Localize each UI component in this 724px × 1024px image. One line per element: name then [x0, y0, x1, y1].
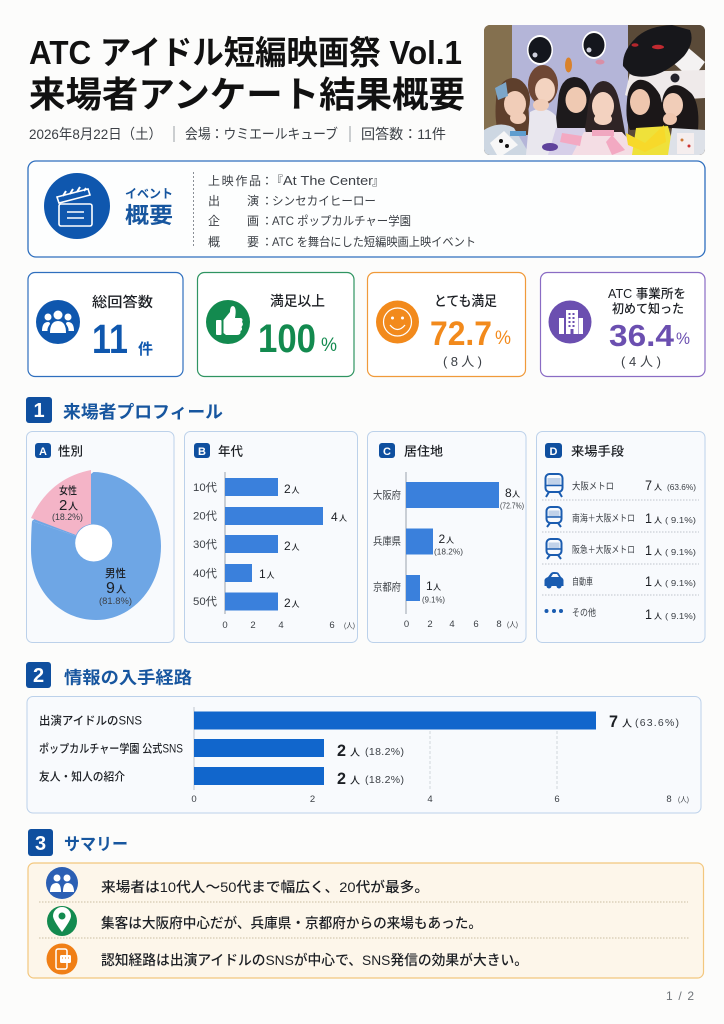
bar chart: age group: 20代 — [193, 510, 217, 522]
pie chart: gender split — [31, 470, 161, 620]
bar chart: residence: 人 — [512, 490, 520, 499]
panel C heading: 居住地 — [404, 444, 444, 458]
icon: phone with chat bubble — [46, 944, 78, 974]
bar chart: information sources: 4 — [427, 794, 433, 805]
pie label: women: 女性 — [59, 484, 77, 497]
row: other: 1 — [645, 606, 652, 622]
pie label: women: (18.2%) — [52, 512, 83, 522]
bar chart: information sources: (18.2%) — [365, 774, 404, 786]
event details: ： — [261, 174, 273, 188]
KPI card: first learned about ATC office: 36.4 — [609, 318, 675, 353]
bar chart: information sources: 2 — [310, 794, 315, 805]
row: Hankyu + Osaka Metro: 人 — [654, 548, 662, 557]
bar chart: information sources: (人) — [678, 795, 689, 804]
summary item: awareness channel: 認知経路は出演アイドルのSNSが中心で、SNS発信の効果が大きい。 — [101, 952, 528, 968]
row: Nankai + Osaka Metro: 人 — [654, 516, 662, 525]
row: other: 人 — [654, 612, 662, 621]
bar chart: age group: 6 — [329, 620, 335, 631]
event details: ： — [261, 214, 273, 228]
pie label: men: 男性 — [105, 566, 126, 580]
panel: event overview — [28, 161, 705, 257]
event overview heading: イベント — [125, 187, 173, 201]
bar chart: information sources: (18.2%) — [365, 746, 404, 758]
KPI card: satisfied or above — [198, 272, 354, 376]
bar chart: residence: 2 — [438, 532, 446, 546]
panel B heading: B — [198, 446, 206, 458]
row: Osaka Metro: 人 — [654, 483, 662, 492]
heading: section 3 summary: 3 — [35, 833, 46, 855]
event date, venue and response count: 会場：ウミエールキューブ — [185, 126, 338, 142]
row: Osaka Metro: 大阪メトロ — [572, 480, 614, 492]
icon: thumbs up — [206, 300, 250, 344]
panel C heading: C — [383, 446, 391, 458]
bar chart: age group: 10代 — [193, 481, 217, 494]
heading: section 3 summary: サマリー — [64, 835, 128, 854]
heading: section 1 visitor profile: 来場者プロフィール — [63, 402, 223, 422]
panel A heading: A — [39, 446, 47, 458]
KPI card: first learned about ATC office — [540, 272, 705, 376]
bar chart: age group: 30代 — [193, 538, 217, 551]
KPI card: total responses: 件 — [138, 341, 153, 358]
KPI card: first learned about ATC office: % — [676, 329, 690, 348]
panel B: age group — [184, 432, 358, 642]
bar chart: age group: 人 — [292, 486, 300, 495]
event details: 出 — [208, 194, 220, 208]
KPI card: total responses: 総回答数 — [92, 294, 153, 310]
KPI card: very satisfied: ( 8 人 ) — [443, 354, 482, 369]
bar chart: information sources: 2 — [337, 769, 346, 788]
heading: section 2 information sources: 情報の入手経路 — [64, 668, 192, 688]
panel D: means of transport — [536, 432, 705, 642]
event date, venue and response count — [29, 126, 446, 142]
bar chart: age group: 4 — [278, 620, 284, 631]
KPI card: first learned about ATC office: ( 4 人 ) — [621, 354, 661, 369]
bar chart: age group: 1 — [259, 567, 266, 581]
row: car: 1 — [645, 573, 652, 589]
pie label: men — [99, 566, 132, 607]
row: Hankyu + Osaka Metro: 阪急＋大阪メトロ — [572, 544, 635, 556]
panel B heading: 年代 — [218, 444, 243, 458]
heading: section 2 information sources: 2 — [33, 665, 44, 687]
event details: 概 — [208, 235, 220, 249]
bar chart: age group: 50代 — [193, 595, 217, 608]
bar chart: age group: 4 — [331, 510, 338, 524]
icon: smiley — [376, 300, 419, 344]
bar chart: residence: 京都府 — [373, 582, 401, 594]
row: car: 人 — [654, 579, 662, 588]
event details: 』 — [372, 174, 384, 188]
icon: dots — [544, 609, 563, 613]
panel A: gender — [26, 432, 174, 642]
bar chart: residence: 4 — [449, 619, 455, 630]
bar chart: residence: (18.2%) — [434, 548, 463, 556]
bar chart: residence: 大阪府 — [373, 488, 401, 502]
bar chart: age group: 2 — [250, 620, 256, 631]
pie label: men: (81.8%) — [99, 596, 132, 607]
panel: summary — [28, 863, 704, 978]
KPI card: satisfied or above: 100 — [258, 317, 316, 361]
icon: train — [546, 507, 562, 527]
event details: 上映作品 — [208, 174, 261, 188]
icon: clapperboard — [44, 173, 110, 239]
bar chart: age group: 2 — [284, 596, 291, 610]
row: other: その他 — [572, 607, 596, 619]
bar chart: residence: 人 — [446, 536, 454, 545]
bar chart: information sources: 人 — [350, 748, 360, 759]
KPI card: total responses: 11 — [92, 316, 128, 362]
pie label: women: 2 — [59, 497, 67, 514]
KPI card: satisfied or above: 満足以上 — [270, 293, 325, 309]
event details: ATC ポップカルチャー学園 — [272, 213, 411, 228]
event details — [208, 173, 476, 249]
bar chart: age group: 人 — [292, 543, 300, 552]
event date, venue and response count: 2026年8月22日（土） — [29, 126, 162, 142]
title: ATC アイドル短編映画祭 Vol.1 — [29, 34, 462, 71]
bar chart: residence: 8 — [496, 619, 502, 630]
row: Hankyu + Osaka Metro — [546, 539, 696, 559]
icon: train — [546, 539, 562, 559]
panel D heading — [545, 443, 625, 458]
row: Nankai + Osaka Metro: 1 — [645, 510, 652, 526]
KPI card: very satisfied — [368, 272, 526, 376]
event overview heading — [125, 187, 173, 228]
bar chart: residence: 8 — [505, 486, 512, 500]
bar chart: information sources: 出演アイドルのSNS — [39, 714, 142, 728]
bar chart: information sources: 8 — [666, 794, 672, 805]
bar chart: age group: 40代 — [193, 567, 217, 580]
bar chart: residence: 6 — [473, 619, 479, 630]
row: Hankyu + Osaka Metro: ( 9.1%) — [665, 547, 696, 557]
KPI card: very satisfied: % — [495, 328, 511, 349]
icon: people — [36, 300, 80, 344]
KPI card: very satisfied: とても満足 — [434, 293, 497, 309]
row: Nankai + Osaka Metro: ( 9.1%) — [665, 515, 696, 525]
bar chart: information sources: 人 — [350, 776, 360, 787]
bar chart: age group: (人) — [344, 621, 355, 630]
panel D heading: 来場手段 — [571, 444, 625, 458]
icon: office building — [548, 300, 592, 344]
KPI card: very satisfied: 72.7 — [430, 315, 492, 353]
page number: 1 / 2 — [666, 989, 694, 1003]
event details: シンセカイヒーロー — [272, 194, 376, 208]
heading: section 2 information sources — [26, 662, 192, 688]
event details: ： — [261, 194, 273, 208]
bar chart: age group: 人 — [266, 571, 274, 580]
event details: 要 — [247, 235, 259, 249]
bar chart: residence: (72.7%) — [500, 502, 524, 510]
row: Osaka Metro: 7 — [645, 477, 652, 493]
panel C: residence — [368, 432, 526, 642]
heading: section 1 visitor profile — [26, 397, 223, 423]
heading: section 1 visitor profile: 1 — [33, 400, 45, 422]
title — [29, 34, 465, 115]
photo: idols in front of the mascot backdrop — [484, 25, 705, 155]
bar chart: age group — [193, 472, 355, 631]
event details: 演 — [247, 194, 259, 208]
row: Hankyu + Osaka Metro: 1 — [645, 542, 652, 558]
KPI card: satisfied or above: % — [321, 335, 337, 356]
event details: 企 — [208, 214, 220, 228]
panel C heading — [379, 443, 444, 458]
summary item: visitors — [46, 867, 429, 899]
bar chart: age group: 0 — [222, 620, 228, 631]
panel B heading — [194, 443, 243, 458]
bar chart: residence: 人 — [433, 583, 441, 592]
event details: ATC を舞台にした短編映画上映イベント — [272, 234, 476, 249]
bar chart: residence: 0 — [404, 619, 409, 630]
KPI card: first learned about ATC office: ATC 事業所を — [608, 286, 686, 301]
panel A heading — [35, 443, 83, 458]
bar chart: information sources: 7 — [609, 712, 618, 731]
bar chart: information sources: (63.6%) — [635, 717, 679, 729]
bar chart: information sources: 友人・知人の紹介 — [39, 770, 125, 784]
icon: people — [46, 867, 78, 899]
event details: 『 — [271, 174, 283, 188]
bar chart: residence: 1 — [426, 579, 433, 593]
KPI card: total responses — [28, 272, 183, 376]
bar chart: age group: 2 — [284, 539, 291, 553]
icon: car — [544, 572, 564, 588]
bar chart: information sources: 人 — [622, 719, 632, 730]
row: other — [544, 606, 696, 622]
summary item: visitors: 来場者は10代人〜50代まで幅広く、20代が最多。 — [101, 879, 429, 895]
summary item: catchment area — [47, 906, 482, 936]
panel: information sources chart — [27, 696, 701, 813]
event details: 画 — [247, 214, 259, 228]
pie label: women: 人 — [68, 502, 78, 513]
title: 来場者アンケート結果概要 — [29, 74, 465, 115]
bar chart: residence: (人) — [507, 620, 518, 629]
bar chart: residence: (9.1%) — [422, 596, 445, 604]
panel A heading: 性別 — [58, 444, 83, 458]
panel D heading: D — [550, 446, 558, 458]
event date, venue and response count: 回答数：11件 — [361, 126, 446, 142]
event details: At The Center — [283, 173, 374, 188]
row: car — [544, 572, 696, 589]
bar chart: information sources: 0 — [191, 794, 197, 805]
event overview heading: 概要 — [125, 203, 173, 228]
row: Nankai + Osaka Metro — [546, 507, 696, 527]
bar chart: information sources: 2 — [337, 741, 346, 760]
row: other: ( 9.1%) — [665, 611, 696, 621]
row: Osaka Metro: (63.6%) — [667, 482, 696, 492]
bar chart: information sources: 6 — [554, 794, 560, 805]
bar chart: residence: 2 — [427, 619, 433, 630]
row: Nankai + Osaka Metro: 南海＋大阪メトロ — [572, 512, 635, 524]
bar chart: information sources: ポップカルチャー学園 公式SNS — [39, 742, 183, 756]
KPI card: first learned about ATC office: 初めて知った — [612, 301, 684, 316]
row: car: 自動車 — [572, 576, 593, 588]
bar chart: age group: 2 — [284, 482, 291, 496]
pie label: men: 人 — [116, 585, 126, 596]
summary item: catchment area: 集客は大阪府中心だが、兵庫県・京都府からの来場もあった。 — [101, 915, 482, 931]
pie label: men: 9 — [106, 580, 115, 597]
row: Osaka Metro — [546, 474, 696, 497]
bar chart: residence: 兵庫県 — [373, 534, 401, 548]
heading: section 3 summary — [28, 829, 128, 856]
icon: map pin — [47, 906, 77, 936]
event details: ： — [261, 235, 273, 249]
bar chart: residence — [373, 472, 524, 630]
bar chart: age group: 人 — [339, 514, 347, 523]
pie label: women — [52, 484, 83, 522]
bar chart: information sources — [39, 707, 689, 805]
row: car: ( 9.1%) — [665, 578, 696, 588]
summary item: awareness channel — [46, 944, 528, 974]
icon: train — [546, 474, 562, 497]
bar chart: age group: 人 — [292, 600, 300, 609]
